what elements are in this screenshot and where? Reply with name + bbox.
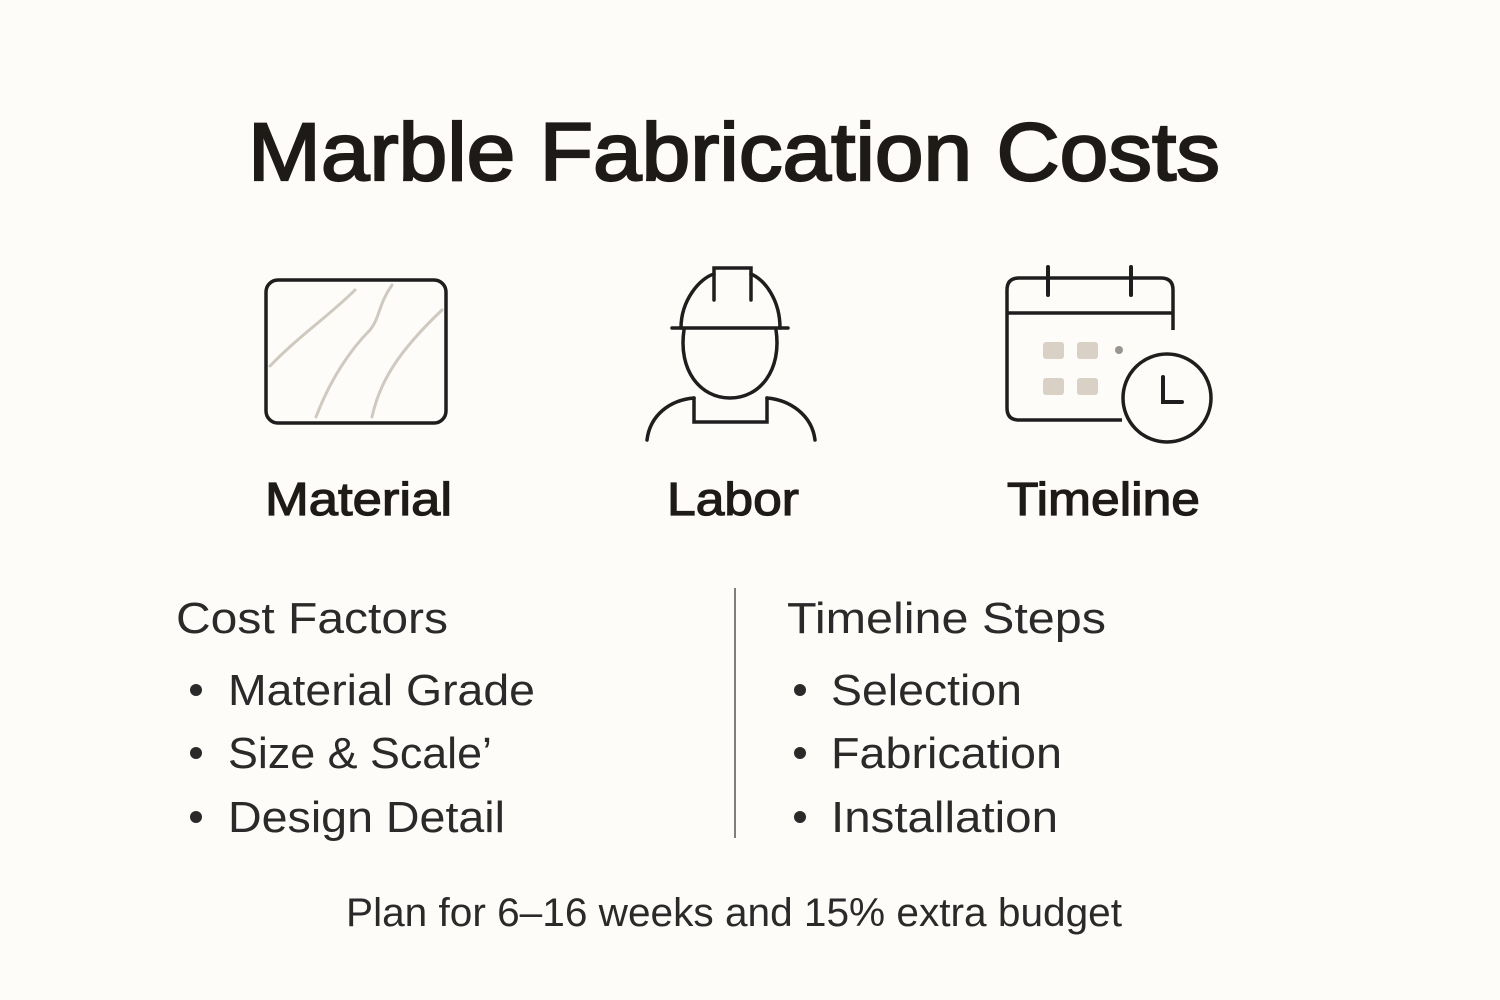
panel: timeline steps: Selection [831,666,1022,715]
panel: cost factors: Design Detail [228,793,505,842]
panel: cost factors [176,594,535,842]
title: Marble Fabrication Costs [248,107,1220,198]
label: Material: Material [265,473,452,525]
panel: timeline steps: Installation [831,793,1058,842]
heading: Timeline Steps: Timeline Steps [787,594,1106,643]
icon: worker with helmet [647,268,815,440]
label: Labor: Labor [667,473,799,525]
panel: timeline steps [787,594,1106,842]
panel: timeline steps: Fabrication [831,729,1062,778]
panel: cost factors: Size & Scale’ [228,729,492,778]
heading: Cost Factors: Cost Factors [176,594,448,643]
icon: marble slab [266,280,446,423]
icon: calendar with clock [1007,267,1211,442]
label: Timeline: Timeline [1007,473,1200,525]
panel: cost factors: Material Grade [228,666,535,715]
footer note: Plan for 6–16 weeks and 15% extra budget [346,891,1122,935]
